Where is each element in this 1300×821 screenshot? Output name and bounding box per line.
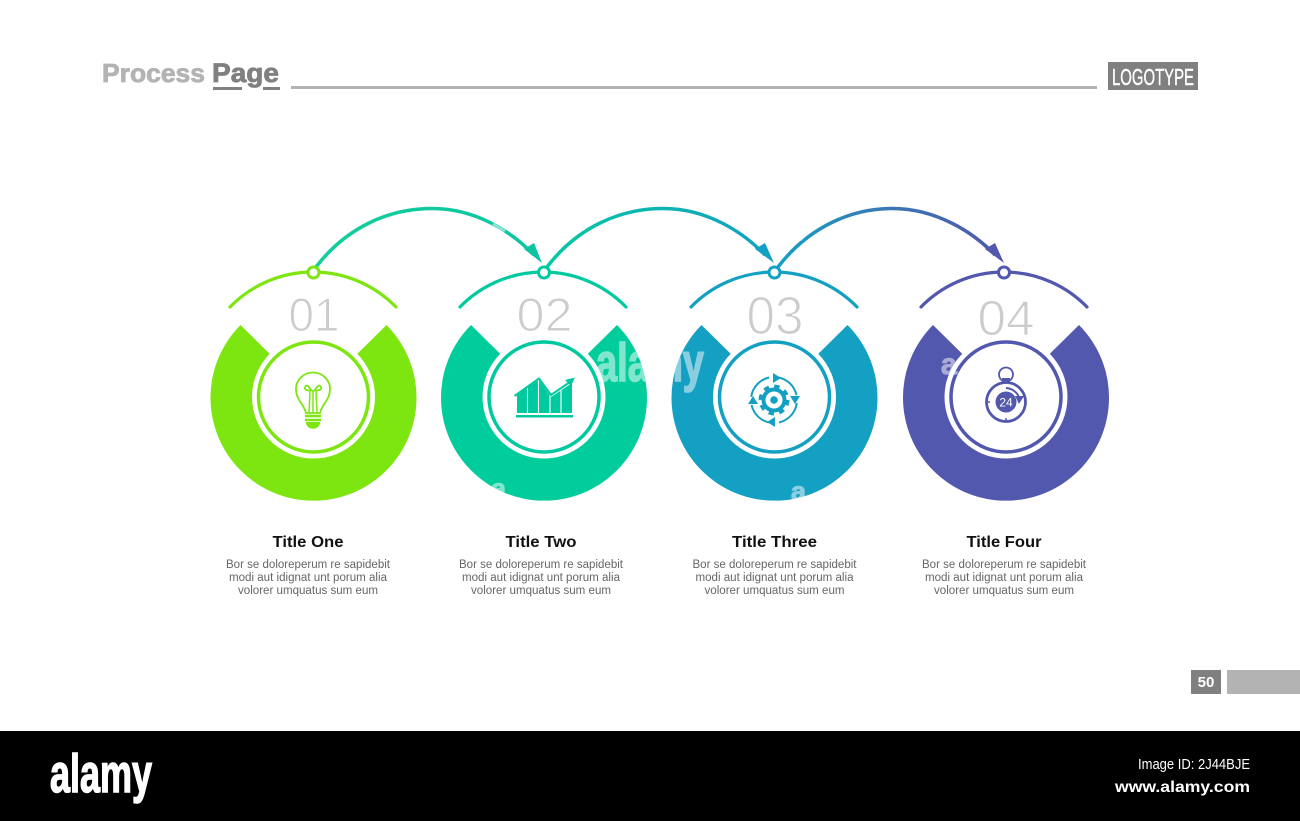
step 4 bbox=[903, 267, 1109, 501]
header: title: Process bbox=[102, 58, 205, 88]
step 2 number: 02 bbox=[516, 288, 572, 341]
watermark fragments: a bbox=[941, 348, 957, 381]
text block: title one bbox=[226, 534, 391, 597]
text block: title two: Title Two bbox=[506, 534, 577, 551]
text block: title two: volorer umquatus sum eum bbox=[471, 585, 611, 597]
text block: title three: Bor se doloreperum re sapidebit bbox=[692, 559, 857, 571]
text block: title four bbox=[922, 534, 1087, 597]
text block: title two: modi aut idignat unt porum alia bbox=[462, 572, 621, 584]
footer image id: Image ID: 2J44BJE bbox=[1138, 756, 1250, 773]
step 1 number: 01 bbox=[288, 288, 340, 341]
icon: gear with rotating arrows bbox=[748, 373, 800, 427]
text block: title two bbox=[459, 534, 624, 597]
text block: title one: volorer umquatus sum eum bbox=[238, 585, 378, 597]
step 4 number: 04 bbox=[978, 292, 1034, 346]
icon: light bulb bbox=[296, 372, 330, 429]
text block: title two: Bor se doloreperum re sapidebit bbox=[459, 559, 624, 571]
text block: title three: volorer umquatus sum eum bbox=[704, 585, 844, 597]
step 3 bbox=[671, 267, 878, 501]
footer: stock image bar bbox=[0, 731, 1300, 821]
icon: 24 hour stopwatch: 24 bbox=[999, 396, 1013, 410]
watermark fragments: alamy bbox=[596, 333, 704, 393]
logotype badge: LOGOTYPE bbox=[1112, 64, 1194, 90]
text block: title four: Title Four bbox=[966, 534, 1042, 551]
step 1 donut bbox=[210, 325, 416, 501]
step 1 top arc with node bbox=[230, 267, 396, 307]
text block: title three: Title Three bbox=[732, 534, 817, 551]
text block: title four: volorer umquatus sum eum bbox=[934, 585, 1074, 597]
connector arrow 2 to 3 bbox=[547, 208, 774, 267]
icon: rising chart bbox=[514, 378, 575, 418]
icon: 24 hour stopwatch bbox=[986, 368, 1026, 422]
text block: title three bbox=[692, 534, 857, 597]
step 1 bbox=[210, 267, 416, 501]
watermark fragments: a bbox=[491, 473, 507, 503]
text block: title one: Bor se doloreperum re sapidebit bbox=[226, 559, 391, 571]
page number bbox=[1191, 670, 1300, 694]
step 4 top arc with node bbox=[921, 267, 1087, 307]
step 3 number: 03 bbox=[746, 286, 804, 346]
footer logo: alamy bbox=[50, 744, 152, 804]
step 4 donut bbox=[903, 325, 1109, 501]
step 2 donut bbox=[441, 325, 647, 501]
watermark fragments: a bbox=[791, 476, 807, 506]
text block: title four: modi aut idignat unt porum alia bbox=[925, 572, 1084, 584]
logotype badge bbox=[1108, 62, 1198, 90]
header: title bbox=[102, 58, 280, 90]
page number: 50 bbox=[1198, 674, 1214, 691]
text block: title three: modi aut idignat unt porum alia bbox=[696, 572, 854, 584]
watermark fragments bbox=[491, 224, 957, 506]
connector arrow 3 to 4 bbox=[778, 208, 1004, 267]
step 3 donut bbox=[671, 325, 878, 501]
step 3 top arc with node bbox=[691, 267, 857, 307]
footer url: www.alamy.com bbox=[1114, 779, 1250, 796]
step 2 bbox=[441, 267, 647, 501]
connector arrow 1 to 2 bbox=[316, 208, 542, 267]
text block: title one: Title One bbox=[272, 534, 344, 551]
header: title: Page bbox=[212, 58, 279, 88]
text block: title one: modi aut idignat unt porum alia bbox=[229, 572, 388, 584]
text block: title four: Bor se doloreperum re sapidebit bbox=[922, 559, 1087, 571]
step 2 top arc with node bbox=[460, 267, 626, 307]
